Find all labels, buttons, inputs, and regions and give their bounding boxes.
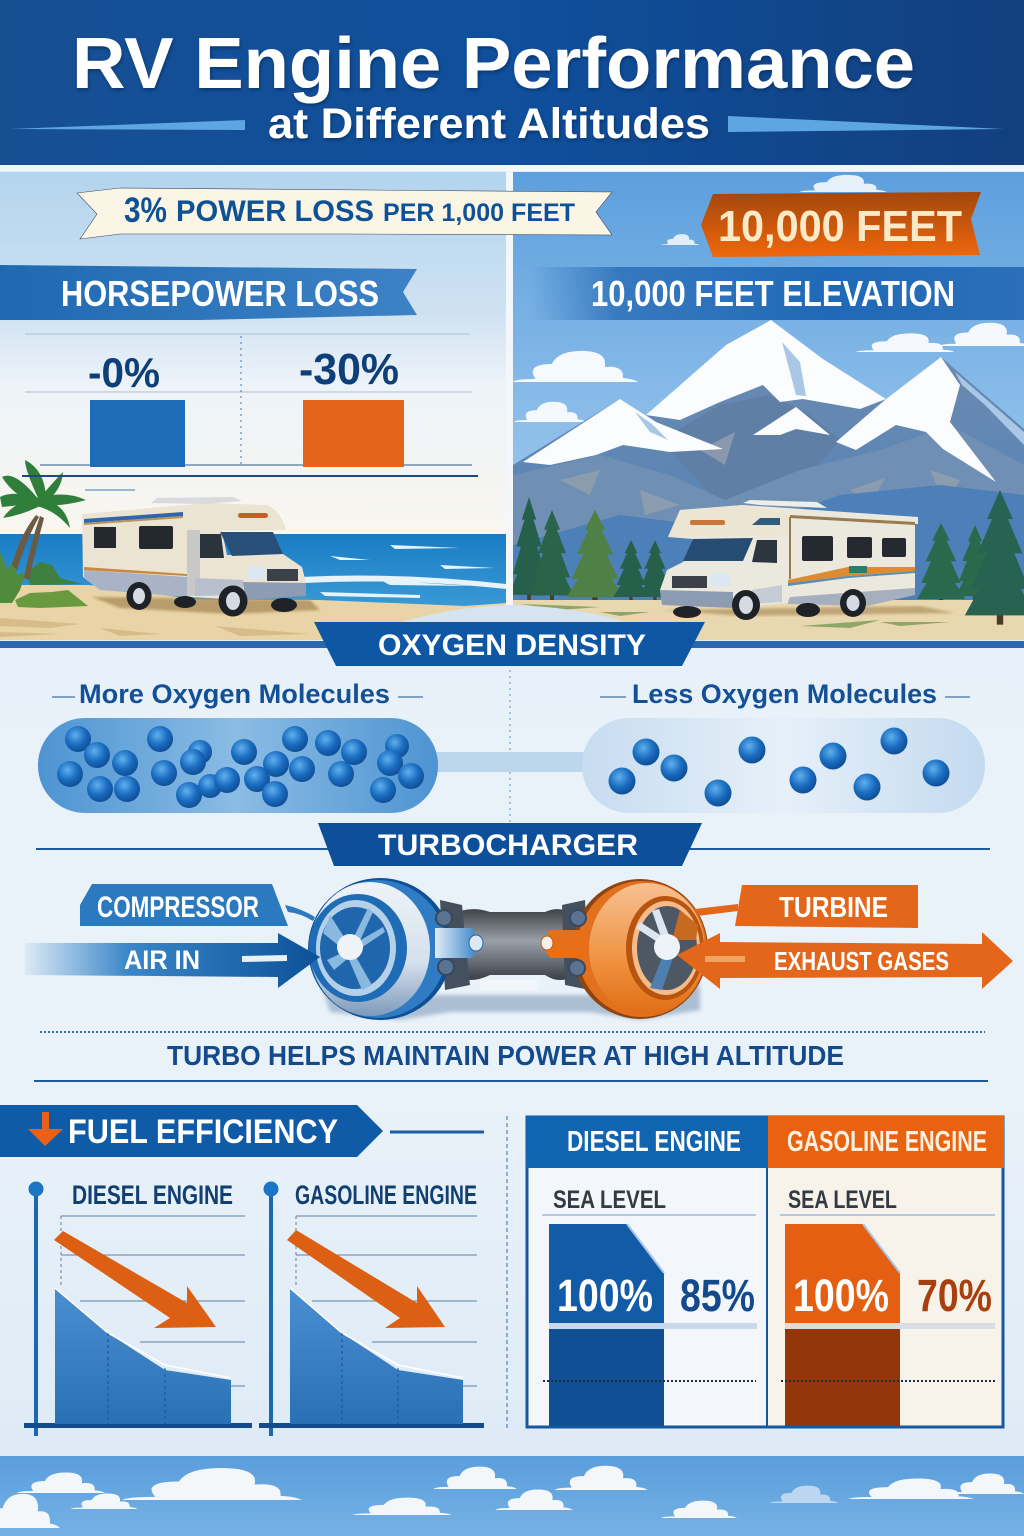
panel: mountain scene xyxy=(509,172,1024,640)
snow caps xyxy=(523,320,996,482)
label: less oxygen molecules: Less Oxygen Molecules xyxy=(632,679,937,709)
caption: turbo helps: TURBO HELPS MAINTAIN POWER AT HIGH ALTITUDE xyxy=(167,1040,844,1071)
banner: 10,000 feet xyxy=(701,192,981,257)
turbocharger illustration xyxy=(308,878,708,1020)
banner: horsepower loss: HORSEPOWER LOSS xyxy=(61,273,379,314)
column: gasoline engine xyxy=(768,1116,1004,1426)
peak behind banner xyxy=(400,605,627,622)
column: gasoline engine: 70% xyxy=(917,1270,992,1321)
label: turbine xyxy=(695,885,918,928)
banner: 3% power loss: 3% xyxy=(124,191,167,230)
bolts xyxy=(436,910,452,926)
banner: 10,000 feet elevation xyxy=(530,267,1024,320)
chart: diesel engine fuel efficiency xyxy=(24,1180,252,1436)
RV at high altitude xyxy=(660,500,918,620)
column: gasoline engine: SEA LEVEL xyxy=(788,1186,897,1214)
banner: 3% power loss: POWER LOSS xyxy=(176,195,374,228)
trees xyxy=(509,497,995,605)
banner: oxygen density: OXYGEN DENSITY xyxy=(378,629,646,662)
header banner xyxy=(0,0,1024,171)
divider xyxy=(509,670,511,822)
banner: 3% power loss xyxy=(77,188,612,239)
arrow: air in xyxy=(25,933,320,988)
connector xyxy=(436,752,584,772)
sea xyxy=(0,534,506,608)
chart: diesel engine fuel efficiency: DIESEL ENGINE xyxy=(72,1180,233,1210)
shaft xyxy=(450,909,575,980)
banner: turbocharger xyxy=(318,823,702,866)
large foreground pine xyxy=(965,490,1024,625)
column: diesel engine: 85% xyxy=(680,1270,755,1321)
shadow under RV xyxy=(92,597,320,614)
banner: fuel efficiency: FUEL EFFICIENCY xyxy=(68,1113,338,1151)
compressor wheel xyxy=(308,878,483,1020)
banner: 10,000 feet elevation: 10,000 FEET ELEVATION xyxy=(591,273,955,314)
palm tree xyxy=(0,460,86,580)
column: diesel engine: DIESEL ENGINE xyxy=(567,1126,741,1158)
mountains xyxy=(513,320,1024,600)
banner: 10,000 feet: 10,000 FEET xyxy=(718,202,962,251)
arrow: exhaust gases xyxy=(677,932,1013,989)
sparse oxygen molecules xyxy=(582,718,985,813)
connector xyxy=(435,928,481,958)
icon: down arrow xyxy=(28,1112,63,1146)
footer sky with clouds xyxy=(0,1456,1024,1536)
turbine wheel xyxy=(541,879,708,1019)
chart: gasoline engine fuel efficiency: GASOLINE ENGINE xyxy=(295,1180,477,1210)
RV at sea level xyxy=(82,497,306,616)
divider xyxy=(506,1116,508,1428)
sand xyxy=(0,585,506,640)
bar chart: horsepower loss xyxy=(22,334,478,476)
banner: fuel efficiency xyxy=(0,1105,484,1157)
column: diesel engine: 100% xyxy=(557,1270,653,1321)
bar: sea level xyxy=(90,400,185,467)
gutter between scenes xyxy=(506,172,513,640)
column: diesel engine xyxy=(526,1116,768,1426)
bolts xyxy=(570,910,586,926)
dotted divider xyxy=(40,1031,985,1033)
table: power comparison xyxy=(526,1116,1004,1428)
bar: high altitude xyxy=(303,400,404,467)
banner: oxygen density xyxy=(314,622,705,666)
value: -0%: -0% xyxy=(88,349,160,396)
rule xyxy=(36,848,990,850)
column: gasoline engine: 100% xyxy=(793,1270,889,1321)
label: compressor: COMPRESSOR xyxy=(97,891,259,924)
banner: turbocharger: TURBOCHARGER xyxy=(378,829,638,862)
label: turbine: TURBINE xyxy=(779,892,888,924)
banner: 3% power loss: PER 1,000 FEET xyxy=(383,199,575,227)
section strip xyxy=(0,641,1024,648)
label: more oxygen molecules: More Oxygen Molecules xyxy=(79,679,390,709)
chart: gasoline engine fuel efficiency xyxy=(259,1180,484,1436)
arrow: air in: AIR IN xyxy=(124,945,200,975)
column: diesel engine: SEA LEVEL xyxy=(553,1186,666,1214)
title: RV Engine Performance xyxy=(72,24,915,104)
arrow: exhaust gases: EXHAUST GASES xyxy=(774,946,949,976)
panel: sea level beach scene xyxy=(0,172,506,640)
shrubs xyxy=(0,552,88,608)
ground xyxy=(513,600,1024,640)
banner: horsepower loss xyxy=(0,265,417,320)
connector xyxy=(541,930,587,958)
title: at Different Altitudes xyxy=(268,100,710,148)
value: -30%: -30% xyxy=(299,345,399,394)
dense oxygen molecules xyxy=(38,718,438,813)
rule xyxy=(34,1080,988,1082)
title xyxy=(72,24,915,148)
